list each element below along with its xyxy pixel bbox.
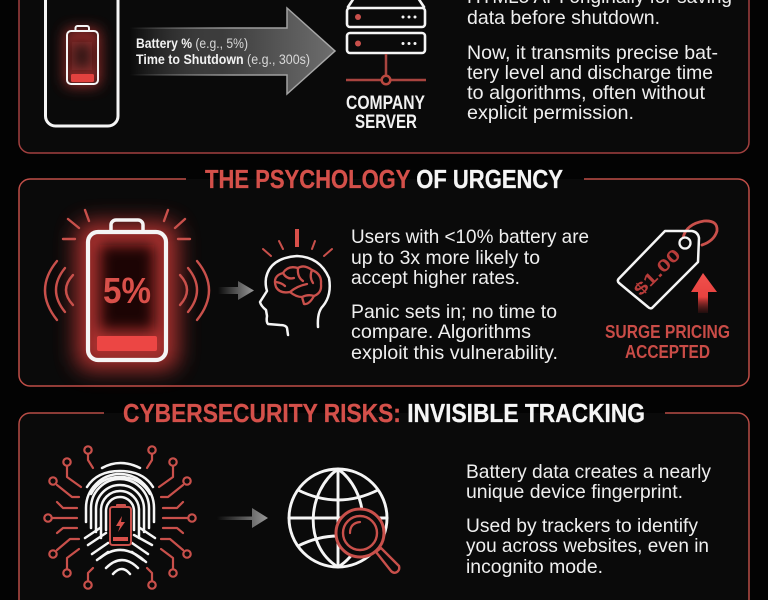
text: urgency statistics: accept higher rates. (351, 267, 520, 289)
text: urgency statistics: up to 3x more likely to (351, 247, 540, 269)
panel: cybersecurity risks (19, 398, 749, 600)
text: fingerprint explanation: you across websites, even in (466, 535, 709, 557)
icon: battery at 5 percent: 5% (103, 270, 151, 311)
circuit traces (44, 446, 196, 589)
arrow label: Time to Shutdown (e.g., 300s) (136, 52, 310, 67)
battery with bolt (110, 505, 131, 545)
arrow: battery to brain (218, 281, 254, 300)
arrow: fingerprint to globe (217, 508, 268, 528)
text: fingerprint explanation: incognito mode. (466, 556, 603, 578)
text: battery API explanation: to algorithms, often without (467, 82, 706, 104)
text: battery API explanation: Now, it transmits precise bat- (467, 42, 718, 64)
icon: price tag: $1.00 (630, 245, 685, 300)
heading: cybersecurity risks invisible tracking: CYBERSECURITY RISKS: INVISIBLE TRACKING (123, 398, 645, 428)
text: fingerprint explanation: Used by trackers to identify (466, 515, 698, 537)
icon: up arrow (691, 273, 717, 313)
label: company server: SERVER (355, 112, 417, 133)
text: urgency statistics: Users with <10% battery are (351, 226, 589, 248)
text: fingerprint explanation: unique device fingerprint. (466, 481, 683, 503)
text: battery API explanation (467, 0, 732, 124)
arrow label: Battery % (e.g., 5%) (136, 36, 248, 51)
text: fingerprint explanation: Battery data creates a nearly (466, 461, 711, 483)
icon: fingerprint with circuit traces (44, 446, 196, 589)
panel: psychology of urgency (19, 164, 749, 386)
text: battery API explanation: data before shutdown. (467, 7, 660, 29)
text: fingerprint explanation (466, 461, 711, 578)
icon: phone with low battery (46, 0, 118, 126)
icon: globe with magnifying glass (289, 469, 399, 573)
text: urgency statistics: exploit this vulnerability. (351, 342, 558, 364)
arrow: data flow to server (130, 8, 335, 94)
label: company server (346, 93, 425, 133)
icon: battery at 5 percent (45, 210, 209, 370)
heading: the psychology of urgency: THE PSYCHOLOGY OF URGENCY (205, 164, 563, 194)
arrow label (136, 36, 310, 67)
fingerprint ridges (85, 463, 155, 574)
alert rays and vibration waves (45, 210, 209, 320)
label: surge pricing accepted: ACCEPTED (625, 341, 710, 362)
text: urgency statistics: Panic sets in; no time to (351, 301, 557, 323)
text: battery API explanation: tery level and discharge time (467, 62, 713, 84)
label: company server: COMPANY (346, 93, 425, 114)
text: urgency statistics: compare. Algorithms (351, 321, 531, 343)
text: battery API explanation: explicit permission. (467, 102, 634, 124)
label: surge pricing accepted: SURGE PRICING (605, 321, 730, 342)
icon: anxious head with brain (260, 229, 332, 335)
text: urgency statistics (351, 226, 589, 364)
panel: data transmission (19, 0, 749, 153)
icon: company server (346, 0, 426, 84)
icon: price tag (618, 221, 717, 308)
label: surge pricing accepted (605, 321, 730, 362)
